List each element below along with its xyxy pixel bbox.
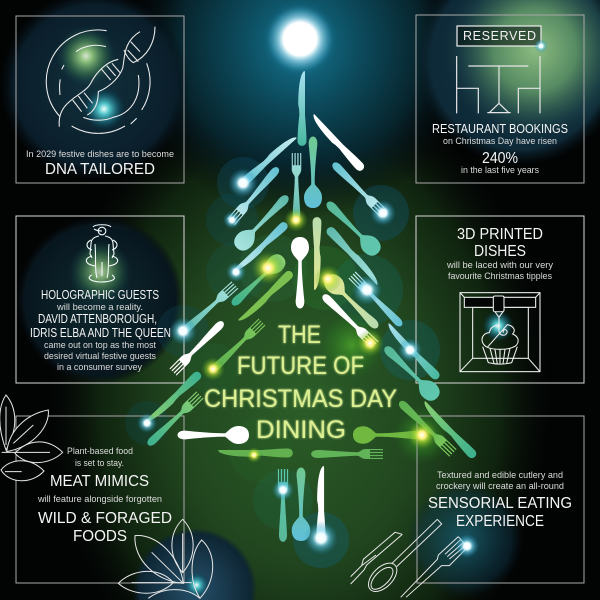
outline spoon bowl (363, 558, 402, 597)
icon: leaves top left (0, 395, 63, 481)
bokeh circles (125, 157, 452, 568)
panel: DNA tailored (16, 16, 184, 183)
white fork (320, 292, 378, 349)
outline knife (351, 532, 402, 584)
text: foods heading: FOODS (73, 528, 127, 545)
fork (227, 164, 282, 225)
text: 3D printed heading: 3D PRINTED (457, 226, 543, 243)
knife (232, 220, 289, 275)
knife (237, 269, 295, 325)
text: set to stay: is set to stay. (75, 458, 124, 469)
white knife (309, 113, 366, 173)
knife (240, 133, 298, 186)
text: restaurant bookings: RESTAURANT BOOKINGS (432, 122, 568, 136)
icon: 3D printer with cupcake (460, 293, 540, 372)
text: plant-based food: Plant-based food (67, 446, 133, 457)
green spoon (353, 426, 422, 444)
icon: leaves bottom (118, 519, 213, 598)
knife (218, 448, 293, 458)
icon: DNA double helix in plate (46, 26, 155, 133)
spoon (321, 196, 384, 259)
knife (420, 400, 478, 460)
text: Idris Elba and the Queen: IDRIS ELBA AND THE QUEEN (30, 326, 171, 340)
knife (298, 71, 306, 146)
text: laced with: will be laced with our very (446, 260, 553, 271)
panel: 3D printed dishes (416, 216, 584, 383)
star light (262, 1, 338, 77)
title: THE (278, 321, 321, 349)
icon: reserved sign: RESERVED (463, 29, 536, 43)
green fork (209, 319, 265, 374)
outline spoon bowl inner (367, 564, 397, 593)
text: wild and foraged heading: WILD & FORAGED (38, 510, 172, 527)
icon: table and chairs (457, 56, 540, 113)
fork (348, 272, 405, 329)
spoon (230, 190, 294, 254)
spoon (379, 341, 443, 405)
text: favourite tipples: favourite Christmas tipples (448, 271, 552, 282)
text: experience heading: EXPERIENCE (456, 513, 544, 530)
text: meat mimics heading: MEAT MIMICS (50, 473, 149, 490)
tree: cutlery tree (144, 1, 478, 543)
panel: sensorial eating (417, 416, 584, 583)
fork (180, 281, 238, 335)
white spoon (178, 426, 249, 444)
outline spoon (392, 519, 442, 567)
fork (311, 449, 383, 459)
text: dishes heading: DISHES (474, 243, 526, 260)
number: 240%: 240% (482, 150, 518, 167)
text: sensorial eating heading: SENSORIAL EATING (428, 495, 572, 512)
text: desired virtual: desired virtual festive guests (44, 351, 156, 362)
title: CHRISTMAS DAY (204, 385, 397, 413)
text: on Christmas Day: on Christmas Day have risen (443, 136, 557, 147)
knife (144, 370, 203, 426)
text: DNA tailored heading: DNA TAILORED (45, 161, 155, 178)
text: last five years: in the last five years (461, 165, 539, 176)
title (204, 321, 397, 444)
lights on tree (137, 168, 479, 558)
panel: restaurant bookings (416, 15, 584, 183)
panel: meat mimics (16, 416, 184, 583)
text: textured and edible: Textured and edible cutlery and (437, 470, 563, 481)
outline fork (401, 537, 468, 597)
knife (384, 322, 441, 381)
panel: holographic guests (16, 216, 184, 383)
fork (278, 469, 288, 542)
text: crockery: crockery will create an all-round (436, 481, 564, 492)
icon: outlined cutlery bottom right (351, 519, 468, 597)
knife (325, 225, 382, 286)
center spoon (291, 237, 309, 308)
text: consumer survey: in a consumer survey (57, 362, 142, 373)
text: become a reality: will become a reality. (56, 302, 143, 313)
fork (292, 153, 301, 221)
title: FUTURE OF (237, 352, 364, 380)
fork (145, 391, 203, 448)
knife (313, 217, 321, 290)
spoon (292, 468, 310, 541)
icon: reserved sign (457, 26, 548, 53)
knife (316, 466, 326, 543)
white fork (169, 318, 227, 376)
text: DNA intro: In 2029 festive dishes are to become (26, 149, 174, 160)
fork (396, 398, 457, 457)
text: David Attenborough: DAVID ATTENBOROUGH, (38, 312, 157, 326)
fork (330, 160, 388, 218)
text: will feature: will feature alongside forgotten (37, 494, 162, 505)
icon: hologram figure (68, 225, 132, 304)
title: DINING (256, 416, 346, 444)
spoon (226, 251, 289, 311)
text: came out on top: came out on top as the most (44, 340, 156, 351)
spoon (321, 271, 384, 334)
text: holographic guests heading: HOLOGRAPHIC GUESTS (41, 288, 159, 302)
spoon (304, 137, 322, 208)
